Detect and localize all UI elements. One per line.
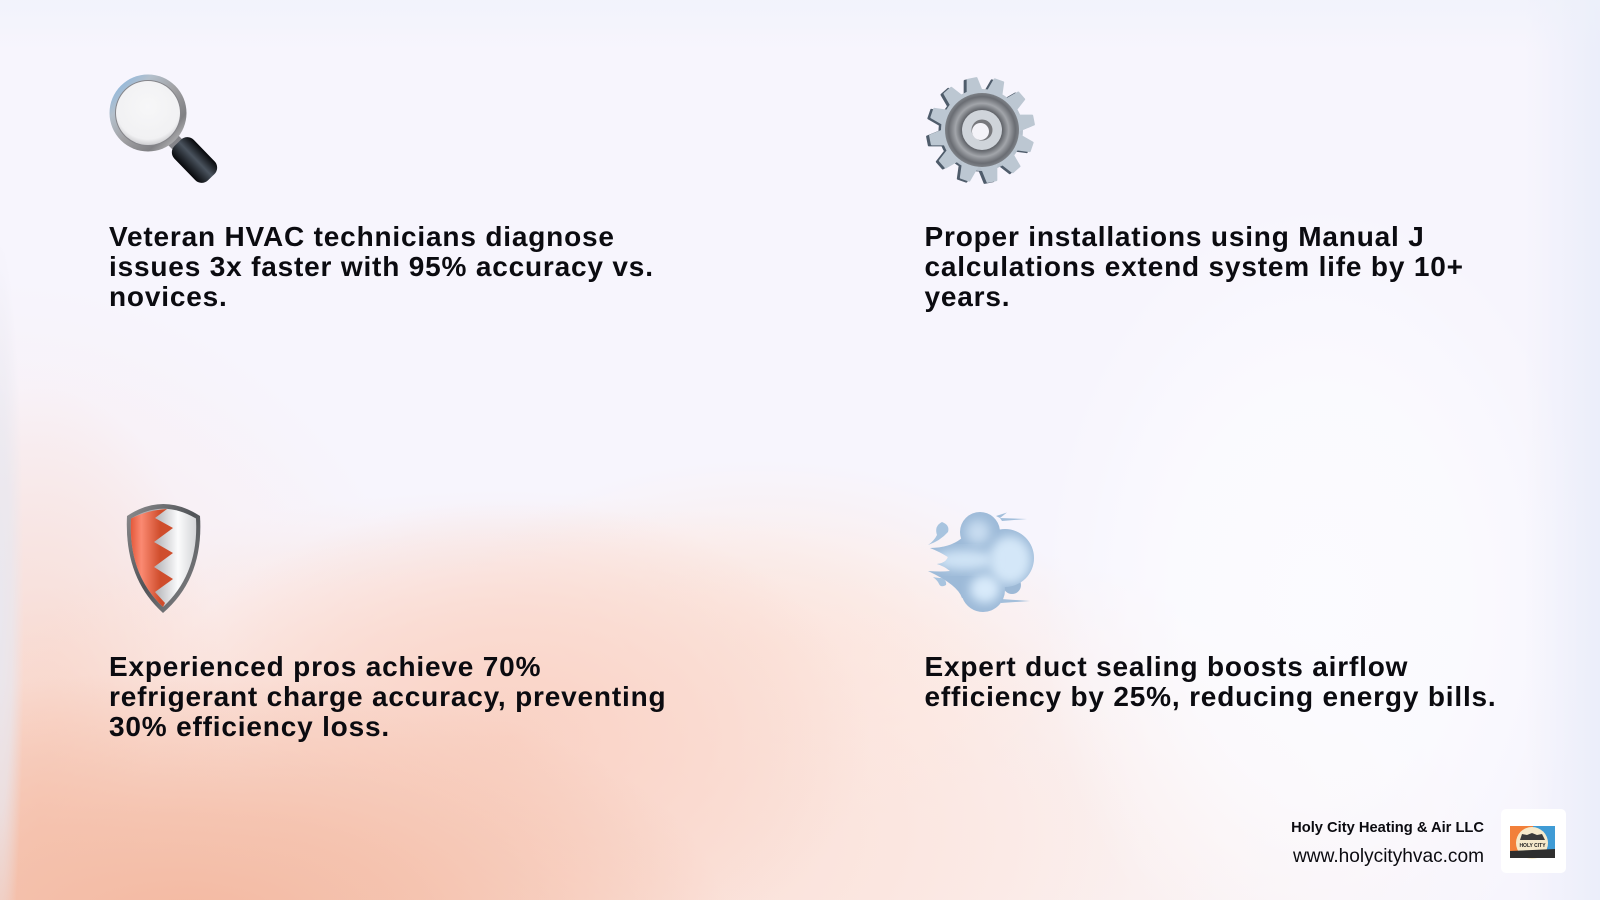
icon: dash of air	[928, 512, 1034, 612]
icon: magnifying glass	[110, 74, 218, 183]
logo tile: HOLY CITY	[1519, 843, 1546, 849]
stat: duct sealing: efficiency by 25%, reducing energy bills.	[924, 681, 1497, 712]
stat: refrigerant: 30% efficiency loss.	[109, 711, 390, 742]
icon: gear	[926, 77, 1035, 184]
logo tile	[1501, 809, 1566, 873]
stat: technicians: Veteran HVAC technicians diagnose	[109, 221, 615, 252]
stat: refrigerant: refrigerant charge accuracy, preventing	[109, 681, 666, 712]
company name: Holy City Heating & Air LLC	[1291, 820, 1484, 836]
stat: duct sealing	[924, 651, 1497, 712]
stat: technicians: novices.	[109, 281, 228, 312]
stat: refrigerant: Experienced pros achieve 70%	[109, 651, 541, 682]
website: www.holycityhvac.com	[1293, 846, 1484, 867]
brand footer	[1291, 809, 1566, 873]
icon: shield	[126, 504, 200, 613]
stat: duct sealing: Expert duct sealing boosts airflow	[924, 651, 1408, 682]
stat: installations: calculations extend system life by 10+	[924, 251, 1464, 282]
stat: installations	[924, 221, 1464, 312]
stat: technicians	[109, 221, 654, 312]
stat: installations: years.	[924, 281, 1010, 312]
stat: technicians: issues 3x faster with 95% accuracy vs.	[109, 251, 654, 282]
stat: installations: Proper installations using Manual J	[924, 221, 1425, 252]
stat: refrigerant	[109, 651, 666, 742]
